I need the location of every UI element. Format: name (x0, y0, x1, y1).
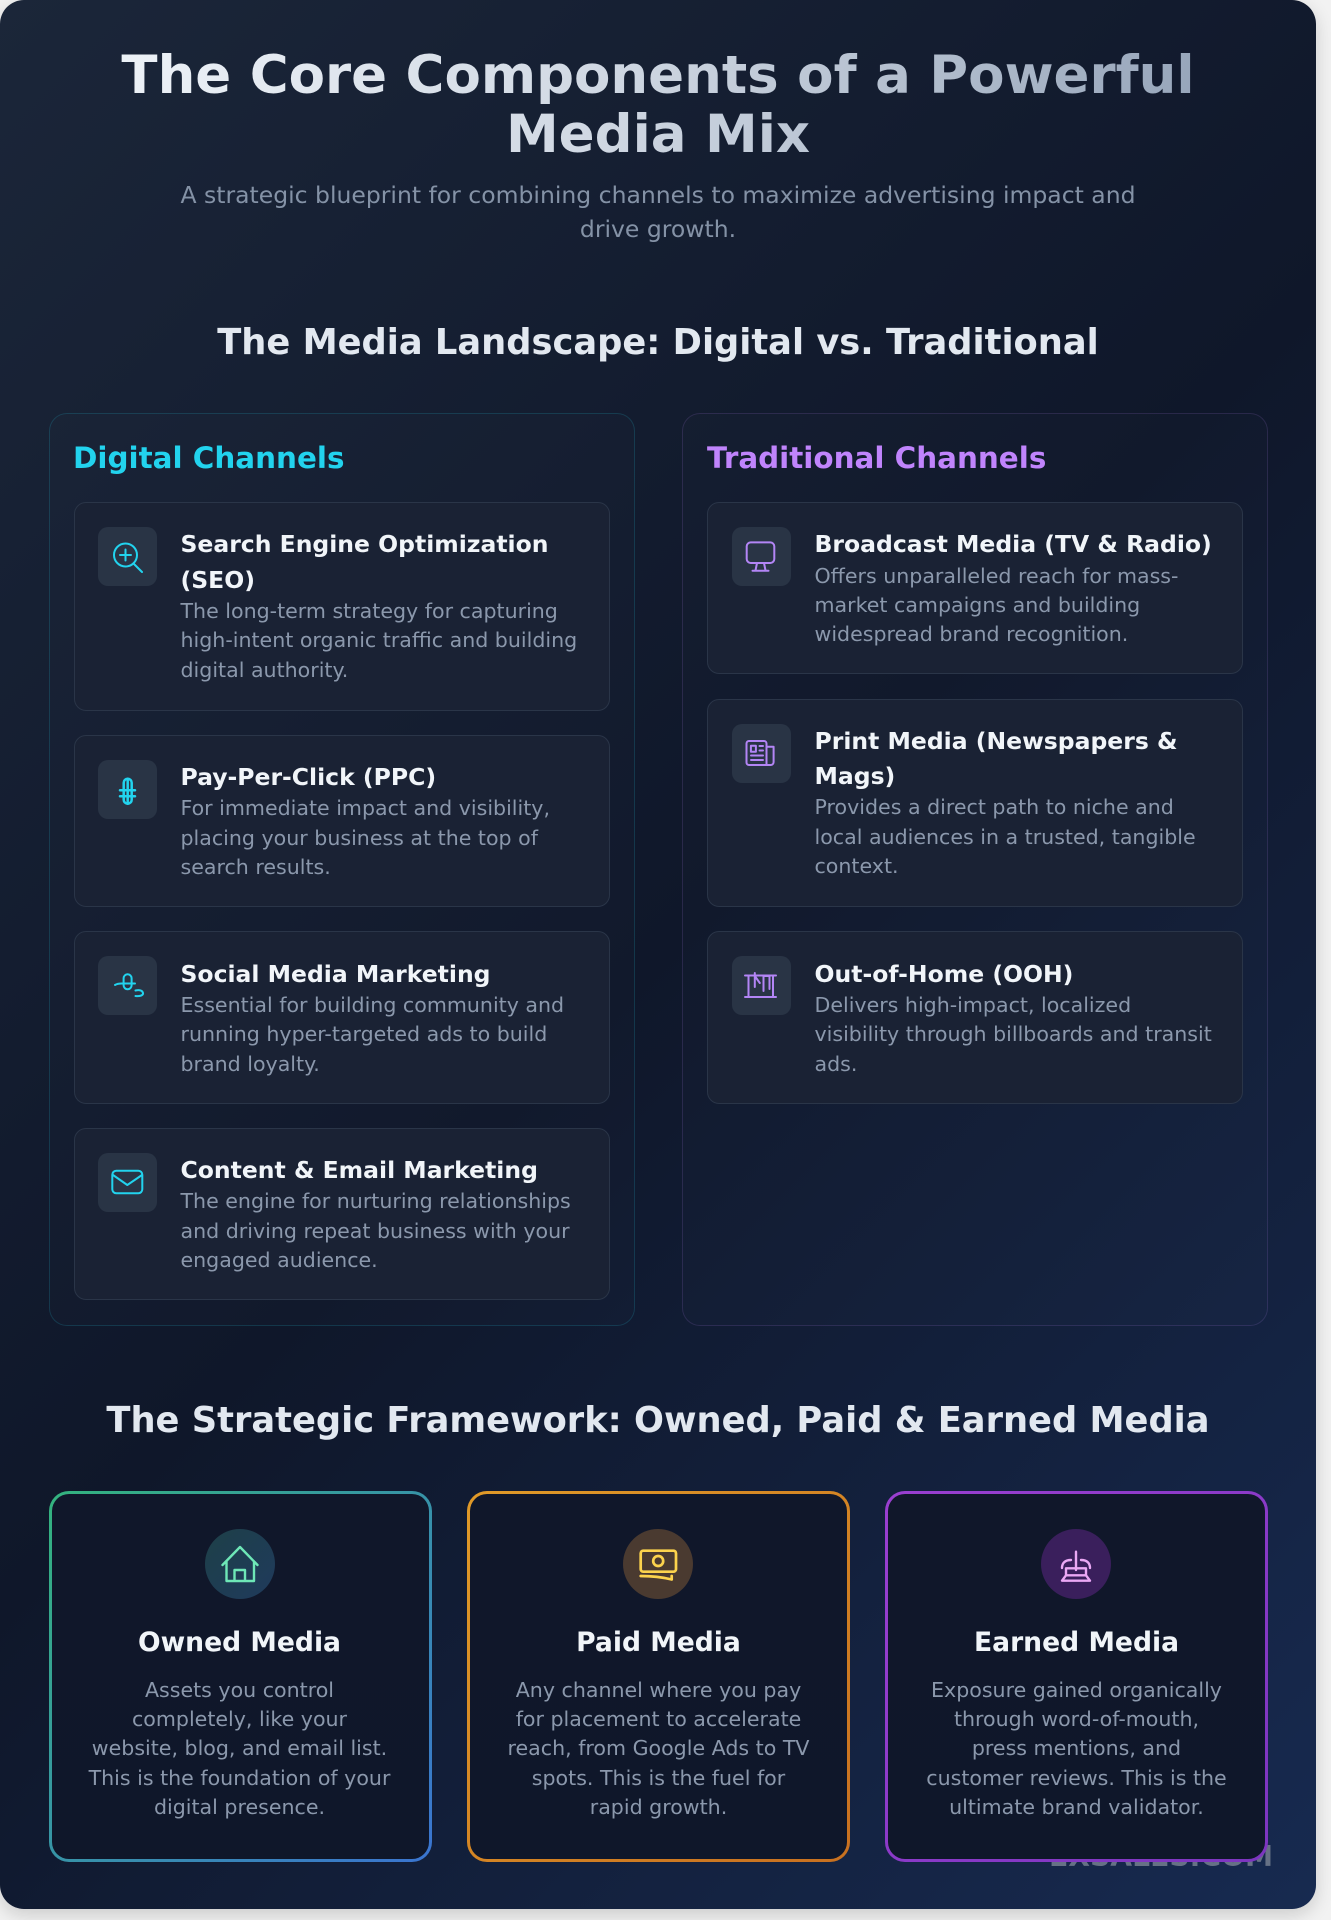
subtitle: A strategic blueprint for combining channels to maximize advertising impact and (180, 181, 1136, 209)
PPC description: placing your business at the top of (180, 826, 538, 850)
social description (180, 993, 564, 1076)
print description (814, 795, 1196, 878)
social description: brand loyalty. (180, 1052, 320, 1076)
earned description (926, 1678, 1227, 1819)
icon: banknote (623, 1529, 693, 1599)
section heading: media landscape: The Media Landscape: Digital vs. Traditional (217, 322, 1099, 363)
title (100, 46, 1216, 164)
print description: context. (814, 854, 899, 878)
paid description: Any channel where you pay (516, 1678, 801, 1702)
email description: and driving repeat business with your (180, 1219, 570, 1243)
PPC description (180, 796, 550, 879)
panel: traditional channels (682, 413, 1268, 1326)
icon: billboard (732, 956, 791, 1015)
broadcast description: Offers unparalleled reach for mass- (814, 564, 1178, 588)
SEO description (180, 599, 577, 682)
social description: running hyper-targeted ads to build (180, 1022, 547, 1046)
card: print (707, 699, 1243, 907)
panel: digital channels (49, 413, 635, 1326)
owned description: completely, like your (132, 1707, 347, 1731)
heading: digital channels: Digital Channels (73, 441, 344, 475)
SEO title (180, 530, 548, 594)
social title: Social Media Marketing (180, 960, 490, 988)
earned description: press mentions, and (972, 1736, 1181, 1760)
card: out-of-home (707, 931, 1243, 1104)
icon: magnifier (98, 527, 157, 586)
watermark: EXSALES.COM (1049, 1840, 1273, 1873)
title: The Core Components of a Powerful (121, 45, 1195, 106)
PPC description: search results. (180, 855, 331, 879)
PPC title: Pay-Per-Click (PPC) (180, 763, 436, 791)
print description: local audiences in a trusted, tangible (814, 825, 1196, 849)
print title (814, 727, 1178, 790)
icon: monitor (732, 527, 791, 586)
subtitle (180, 181, 1136, 243)
print description: Provides a direct path to niche and (814, 795, 1174, 819)
broadcast description: market campaigns and building (814, 593, 1140, 617)
OOH title: Out-of-Home (OOH) (814, 960, 1073, 988)
earned description: ultimate brand validator. (949, 1795, 1204, 1819)
OOH description: ads. (814, 1052, 857, 1076)
print title: Print Media (Newspapers & (814, 727, 1178, 755)
icon: award bell (1041, 1529, 1111, 1599)
print title: Mags) (814, 762, 895, 790)
icon: social (98, 956, 157, 1015)
paid description (508, 1678, 810, 1819)
earned title: Earned Media (974, 1627, 1179, 1658)
broadcast description (814, 564, 1178, 646)
owned title: Owned Media (138, 1627, 341, 1658)
SEO description: digital authority. (180, 658, 348, 682)
section heading: strategic framework: The Strategic Framework: Owned, Paid & Earned Media (106, 1400, 1210, 1441)
owned description: This is the foundation of your (89, 1766, 390, 1790)
panel: owned media (49, 1491, 432, 1862)
broadcast description: widespread brand recognition. (814, 622, 1128, 646)
SEO description: The long-term strategy for capturing (180, 599, 558, 623)
icon: envelope (98, 1153, 157, 1212)
OOH description (814, 993, 1212, 1076)
broadcast title: Broadcast Media (TV & Radio) (814, 530, 1212, 558)
card: content and email (74, 1128, 610, 1300)
icon: house (204, 1529, 274, 1599)
social description: Essential for building community and (180, 993, 564, 1017)
panel: paid media (467, 1491, 850, 1862)
subtitle: drive growth. (580, 215, 736, 243)
icon: pay-per-click (98, 760, 157, 819)
OOH description: Delivers high-impact, localized (814, 993, 1131, 1017)
earned description: Exposure gained organically (931, 1678, 1222, 1702)
email description (180, 1189, 571, 1272)
email description: engaged audience. (180, 1248, 378, 1272)
owned description: digital presence. (154, 1795, 325, 1819)
owned description (88, 1678, 390, 1819)
owned description: Assets you control (145, 1678, 334, 1702)
panel: earned media (885, 1491, 1268, 1862)
owned description: website, blog, and email list. (92, 1736, 387, 1760)
email title: Content & Email Marketing (180, 1156, 538, 1184)
icon: newspaper (732, 724, 791, 783)
card: SEO (74, 502, 610, 710)
earned description: customer reviews. This is the (926, 1766, 1227, 1790)
email description: The engine for nurturing relationships (180, 1189, 571, 1213)
earned description: through word-of-mouth, (954, 1707, 1199, 1731)
OOH description: visibility through billboards and transit (814, 1022, 1212, 1046)
paid description: rapid growth. (590, 1795, 727, 1819)
SEO title: (SEO) (180, 566, 255, 594)
PPC description: For immediate impact and visibility, (180, 796, 550, 820)
paid description: spots. This is the fuel for (532, 1766, 785, 1790)
SEO description: high-intent organic traffic and building (180, 628, 577, 652)
card: broadcast (707, 502, 1243, 674)
title: Media Mix (506, 104, 810, 165)
paid description: reach, from Google Ads to TV (508, 1736, 809, 1760)
card: PPC (74, 735, 610, 907)
card: social media (74, 931, 610, 1104)
paid description: for placement to accelerate (516, 1707, 801, 1731)
SEO title: Search Engine Optimization (180, 530, 548, 558)
paid title: Paid Media (576, 1627, 741, 1658)
heading: traditional channels: Traditional Channels (707, 441, 1046, 475)
